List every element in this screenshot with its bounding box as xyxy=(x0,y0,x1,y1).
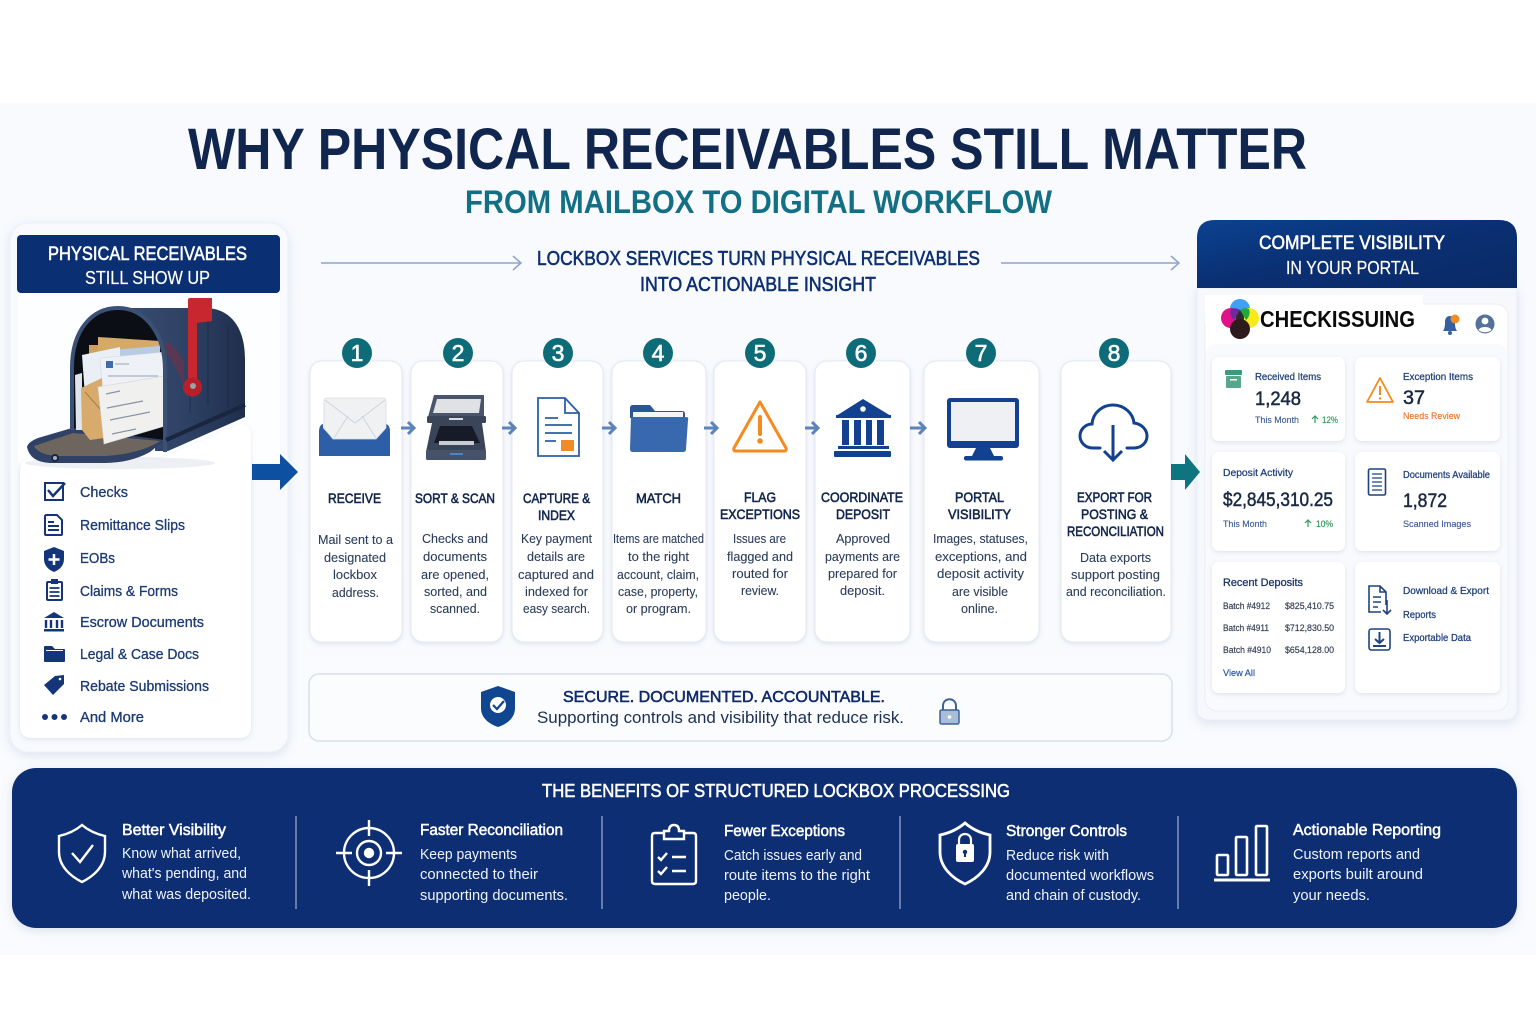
step 7: portal visibility: are visible xyxy=(952,584,1008,599)
envelopes and checks xyxy=(75,337,165,444)
step 3: capture and index: details are xyxy=(527,549,585,564)
list item: remittance slips xyxy=(45,515,185,535)
benefit: faster reconciliation: supporting documents. xyxy=(420,888,568,904)
step 7: portal visibility: Images, statuses, xyxy=(933,531,1028,546)
icon: mailbox xyxy=(25,298,245,469)
callout: secure: Supporting controls and visibility that reduce risk. xyxy=(537,709,904,727)
step 4: match: to the right xyxy=(628,549,689,564)
step 6: coordinate deposit xyxy=(815,338,910,642)
panel: benefits xyxy=(12,768,1517,928)
icon: folder xyxy=(630,405,688,452)
step 3: capture and index: Key payment xyxy=(521,531,592,546)
step 6: coordinate deposit: 6 xyxy=(855,340,867,366)
card: download and export: Download & Export xyxy=(1403,586,1489,597)
benefits heading: THE BENEFITS OF STRUCTURED LOCKBOX PROCESSING xyxy=(542,781,1010,801)
step 8: export: RECONCILIATION xyxy=(1067,523,1164,539)
icon: bank xyxy=(834,399,891,457)
step 3: capture and index: 3 xyxy=(552,340,564,366)
step 1: receive xyxy=(310,338,402,642)
card: recent deposits: Batch #4910 xyxy=(1223,645,1271,655)
step 2: sort and scan: scanned. xyxy=(430,601,480,616)
icon: document xyxy=(538,398,579,456)
section heading: lockbox xyxy=(321,248,1179,296)
card: exception items: Exception Items xyxy=(1403,372,1473,383)
list item: and more xyxy=(42,710,144,726)
step 4: match: account, claim, xyxy=(617,567,699,582)
portal header: IN YOUR PORTAL xyxy=(1286,258,1419,278)
icon: cloud download xyxy=(1080,405,1147,460)
icon: inbox box xyxy=(1225,370,1242,388)
step 1: receive: Mail sent to a xyxy=(318,532,394,547)
subtitle: FROM MAILBOX TO DIGITAL WORKFLOW xyxy=(465,184,1053,220)
step 7: portal visibility: VISIBILITY xyxy=(948,506,1012,522)
icon: envelope in tray xyxy=(319,398,390,456)
section heading: lockbox: LOCKBOX SERVICES TURN PHYSICAL RECEIVABLES xyxy=(537,248,980,270)
panel: physical receivables xyxy=(10,223,288,752)
step 8: export: EXPORT FOR xyxy=(1077,489,1152,505)
card: documents available: Scanned Images xyxy=(1403,519,1471,530)
card: documents available: 1,872 xyxy=(1403,491,1447,512)
step 1: receive: lockbox xyxy=(333,567,377,582)
benefit: fewer exceptions xyxy=(652,823,870,904)
card: recent deposits: Recent Deposits xyxy=(1223,577,1303,589)
step 2: sort and scan: Checks and xyxy=(422,531,488,546)
arrow: process to portal xyxy=(1171,454,1200,490)
step 2: sort and scan: SORT & SCAN xyxy=(415,490,495,506)
list item: claims and forms xyxy=(47,579,178,600)
icon: shield check xyxy=(481,686,515,727)
card: received items: 1,248 xyxy=(1255,389,1301,410)
list item: escrow documents xyxy=(44,612,204,632)
step 5: flag exceptions: review. xyxy=(741,583,779,598)
list item: checks xyxy=(45,483,128,501)
arrow: mail to process xyxy=(252,454,298,490)
card: download and export: Reports xyxy=(1403,610,1436,621)
benefit: faster reconciliation: Keep payments xyxy=(420,847,517,863)
benefit: actionable reporting: Custom reports and xyxy=(1293,847,1420,863)
card: deposit activity: 10% xyxy=(1316,519,1333,530)
benefit: fewer exceptions: Fewer Exceptions xyxy=(724,823,845,840)
card: download and export: Exportable Data xyxy=(1403,633,1471,644)
benefit: stronger controls xyxy=(940,823,1154,904)
step 7: portal visibility xyxy=(924,338,1039,642)
card: download and export xyxy=(1355,562,1500,693)
step 8: export: Data exports xyxy=(1080,550,1151,565)
icon: report download xyxy=(1369,586,1391,614)
step 2: sort and scan: sorted, and xyxy=(424,584,487,599)
card: received items: Received Items xyxy=(1255,372,1321,383)
step 4: match xyxy=(612,338,706,642)
step 1: receive: address. xyxy=(332,585,379,600)
step 8: export: 8 xyxy=(1108,340,1120,366)
step 7: portal visibility: 7 xyxy=(975,340,987,366)
mailbox front frame xyxy=(72,308,245,452)
step 4: match: or program. xyxy=(626,601,691,616)
icon: shield check xyxy=(59,825,105,882)
step 2: sort and scan: are opened, xyxy=(421,567,489,582)
benefit: better visibility: Better Visibility xyxy=(122,822,226,839)
card: deposit activity: This Month xyxy=(1223,519,1267,530)
step 5: flag exceptions: EXCEPTIONS xyxy=(720,506,800,522)
list item: checks: Checks xyxy=(80,485,128,501)
callout: secure xyxy=(309,674,1172,741)
logo: checkissuing: CHECKISSUING xyxy=(1260,306,1415,332)
title: WHY PHYSICAL RECEIVABLES STILL MATTER xyxy=(188,117,1307,182)
card: recent deposits xyxy=(1212,562,1345,693)
step 1: receive: RECEIVE xyxy=(328,490,381,506)
step 6: coordinate deposit: payments are xyxy=(825,549,900,564)
step 3: capture and index xyxy=(512,338,603,642)
icon: scanner xyxy=(426,395,486,460)
step 7: portal visibility: deposit activity xyxy=(937,566,1025,581)
step 5: flag exceptions: FLAG xyxy=(744,489,776,505)
icon: warning xyxy=(1367,378,1393,402)
icon: clipboard xyxy=(652,825,696,884)
step 8: export xyxy=(1061,338,1171,642)
section heading: lockbox: INTO ACTIONABLE INSIGHT xyxy=(640,274,876,296)
step 2: sort and scan xyxy=(411,338,503,642)
list item: rebate submissions xyxy=(44,675,209,695)
portal header: COMPLETE VISIBILITY xyxy=(1259,233,1445,254)
card: recent deposits: $712,830.50 xyxy=(1285,623,1334,633)
step 8: export: and reconciliation. xyxy=(1066,584,1166,599)
step 5: flag exceptions: Issues are xyxy=(733,531,786,546)
benefit: actionable reporting: exports built around xyxy=(1293,867,1423,883)
icon: monitor xyxy=(947,398,1019,460)
arrows between steps xyxy=(401,422,925,434)
panel header: PHYSICAL RECEIVABLES xyxy=(48,244,247,265)
step 6: coordinate deposit: prepared for xyxy=(828,566,898,581)
step 6: coordinate deposit: deposit. xyxy=(840,583,885,598)
step 7: portal visibility: online. xyxy=(961,601,998,616)
benefit: better visibility: what was deposited. xyxy=(121,887,251,903)
benefit: stronger controls: Stronger Controls xyxy=(1006,823,1127,840)
icon: bar chart xyxy=(1214,826,1270,880)
step 1: receive: designated xyxy=(324,550,386,565)
benefit: actionable reporting: your needs. xyxy=(1293,888,1370,904)
step 1: receive: 1 xyxy=(351,340,363,366)
card: deposit activity xyxy=(1212,452,1345,551)
benefit: faster reconciliation: connected to their xyxy=(420,867,538,883)
card: exception items xyxy=(1355,357,1500,441)
icon: target xyxy=(336,820,402,886)
card: documents available: Documents Available xyxy=(1403,470,1490,481)
card: recent deposits: View All xyxy=(1223,668,1255,679)
benefit: better visibility: Know what arrived, xyxy=(122,846,241,862)
step 7: portal visibility: PORTAL xyxy=(955,489,1004,505)
step 3: capture and index: INDEX xyxy=(538,507,576,523)
card: documents available xyxy=(1355,452,1500,551)
list item: escrow documents: Escrow Documents xyxy=(80,615,204,631)
mailbox door xyxy=(27,428,165,463)
card: recent deposits: Batch #4911 xyxy=(1223,623,1269,633)
icon: warning triangle xyxy=(734,402,786,451)
list item: rebate submissions: Rebate Submissions xyxy=(80,679,209,695)
icon: export tray xyxy=(1369,629,1390,650)
step 8: export: support posting xyxy=(1071,567,1160,582)
list item: and more: And More xyxy=(80,710,144,726)
step 6: coordinate deposit: COORDINATE xyxy=(821,489,903,505)
panel header xyxy=(17,235,280,293)
card: received items xyxy=(1212,357,1345,441)
red flag xyxy=(183,298,212,396)
step 5: flag exceptions: 5 xyxy=(754,340,766,366)
step 6: coordinate deposit: DEPOSIT xyxy=(836,506,890,522)
benefit: fewer exceptions: people. xyxy=(724,888,771,904)
benefit: better visibility xyxy=(59,822,251,903)
step 4: match: Items are matched xyxy=(613,531,704,546)
item list card xyxy=(20,424,251,738)
icon: lock xyxy=(940,699,959,724)
benefit: stronger controls: Reduce risk with xyxy=(1006,848,1109,864)
card: recent deposits: $654,128.00 xyxy=(1285,645,1334,655)
benefit: stronger controls: and chain of custody. xyxy=(1006,888,1141,904)
step 6: coordinate deposit: Approved xyxy=(836,531,890,546)
list item: claims and forms: Claims & Forms xyxy=(80,584,178,600)
step 5: flag exceptions: flagged and xyxy=(727,549,793,564)
icon: notification bell xyxy=(1443,314,1460,335)
list item: EOBs xyxy=(44,547,115,572)
benefit: actionable reporting: Actionable Reporting xyxy=(1293,822,1441,839)
step 2: sort and scan: 2 xyxy=(452,340,464,366)
step 4: match: case, property, xyxy=(618,584,698,599)
benefit: fewer exceptions: Catch issues early and xyxy=(724,848,862,864)
benefit: actionable reporting xyxy=(1214,822,1441,904)
icon: user xyxy=(1476,314,1494,334)
step 5: flag exceptions xyxy=(714,338,806,642)
step 4: match: MATCH xyxy=(636,490,681,506)
benefit: stronger controls: documented workflows xyxy=(1006,868,1154,884)
benefit: better visibility: what's pending, and xyxy=(121,866,247,882)
step 3: capture and index: easy search. xyxy=(523,601,590,616)
card: received items: 12% xyxy=(1322,415,1338,426)
card: exception items: 37 xyxy=(1403,388,1425,409)
logo: checkissuing xyxy=(1221,299,1415,339)
card: deposit activity: $2,845,310.25 xyxy=(1223,490,1333,511)
panel header: STILL SHOW UP xyxy=(85,268,210,288)
step 3: capture and index: captured and xyxy=(518,567,594,582)
step 4: match: 4 xyxy=(652,340,665,366)
step 8: export: POSTING & xyxy=(1081,506,1149,522)
portal header xyxy=(1197,220,1517,288)
panel: portal xyxy=(1197,220,1517,720)
benefit: fewer exceptions: route items to the right xyxy=(724,868,870,884)
list item: EOBs: EOBs xyxy=(80,551,115,567)
benefit: faster reconciliation: Faster Reconciliation xyxy=(420,822,563,839)
list item: remittance slips: Remittance Slips xyxy=(80,518,185,534)
step 7: portal visibility: exceptions, and xyxy=(935,549,1027,564)
card: deposit activity: Deposit Activity xyxy=(1223,468,1293,479)
step 3: capture and index: CAPTURE & xyxy=(523,490,591,506)
card: exception items: Needs Review xyxy=(1403,411,1460,422)
card: received items: This Month xyxy=(1255,415,1299,426)
card: recent deposits: $825,410.75 xyxy=(1285,601,1334,611)
benefit: faster reconciliation xyxy=(336,820,568,904)
step 3: capture and index: indexed for xyxy=(525,584,589,599)
icon: document xyxy=(1368,469,1386,495)
list item: legal and case docs: Legal & Case Docs xyxy=(80,647,199,663)
callout: secure: SECURE. DOCUMENTED. ACCOUNTABLE. xyxy=(563,689,885,706)
icon: shield lock xyxy=(940,823,990,884)
step 5: flag exceptions: routed for xyxy=(732,566,789,581)
card: recent deposits: Batch #4912 xyxy=(1223,601,1270,611)
step 2: sort and scan: documents xyxy=(423,549,488,564)
